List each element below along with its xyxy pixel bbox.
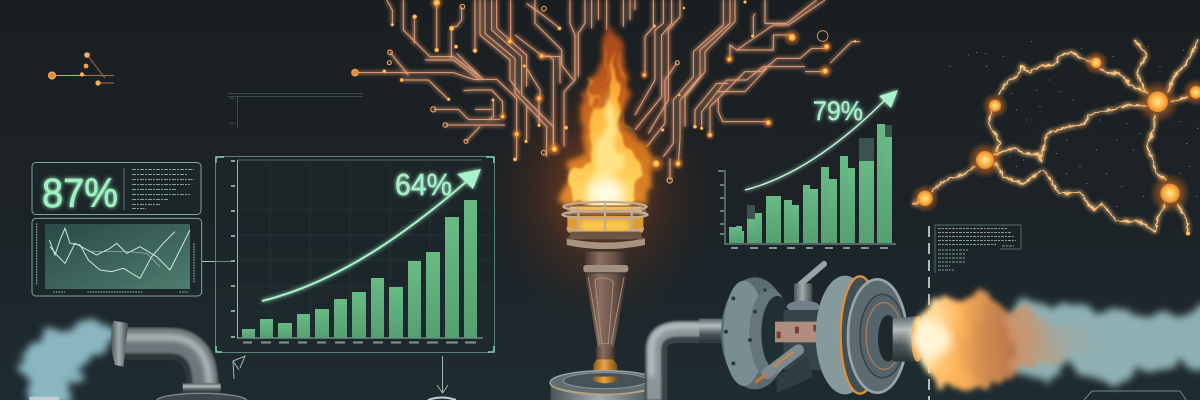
- y axis tick marks: [231, 161, 235, 337]
- line chart panel: [32, 218, 202, 296]
- first housing: [721, 277, 793, 389]
- axes: [238, 160, 483, 338]
- y ticks: [718, 171, 724, 234]
- bottom right panel fragment: [1084, 391, 1186, 400]
- dashed guide line: [928, 226, 930, 400]
- elbow pipe: [120, 337, 209, 385]
- fire glow behind torch: [480, 50, 720, 330]
- line series: [49, 228, 190, 278]
- stat value 87%: 87%: [42, 170, 118, 216]
- small arrow annotations: [233, 356, 448, 393]
- x ticks: [731, 247, 888, 249]
- bars: [729, 124, 892, 243]
- flame body: [917, 295, 1097, 386]
- centre band: [775, 322, 838, 342]
- smoke plume: [1003, 300, 1200, 382]
- shadow bars: [747, 125, 892, 219]
- second housing: [816, 276, 879, 394]
- stat panel: 87%: [32, 162, 201, 216]
- bar chart: 79%: [718, 90, 898, 248]
- left pipe and steam: [20, 318, 247, 400]
- turbine engine: [651, 264, 923, 400]
- feed pipe: [651, 319, 723, 400]
- chart frame: [216, 156, 494, 352]
- stars: [950, 42, 1198, 207]
- bottom centre fragment: [428, 398, 456, 400]
- junction nodes: [910, 50, 1200, 236]
- nozzle: [893, 316, 923, 362]
- circuit nodes: [352, 0, 856, 183]
- exhaust flame and smoke: [912, 295, 1200, 386]
- torch gold collar: [593, 347, 617, 384]
- bars: [242, 200, 477, 338]
- circuit traces rising from flame: [352, 0, 860, 183]
- central flame: [561, 23, 654, 207]
- burner base: [550, 371, 660, 400]
- steam cloud: [20, 318, 113, 400]
- small circuit fragment top left: [48, 48, 114, 94]
- trend arrow: [745, 90, 898, 190]
- torch neck and cone: [583, 252, 628, 347]
- valve and lever: [783, 264, 824, 370]
- text annotation box: [935, 225, 1021, 273]
- torch cup: [562, 202, 648, 249]
- pipe flange: [111, 321, 247, 400]
- bolts: [912, 40, 1198, 233]
- torch burner: [550, 202, 660, 400]
- stat value 64%: 64%: [395, 167, 452, 202]
- white fragment: [29, 397, 59, 400]
- lightning network with stars: [910, 40, 1200, 236]
- connector line: [202, 260, 231, 262]
- left traces: [355, 0, 635, 160]
- stat value 79%: 79%: [813, 96, 863, 126]
- faint upper chart frame: [228, 94, 363, 128]
- trend arrow: [262, 169, 481, 301]
- front disc: [848, 279, 907, 393]
- lower arm: [755, 350, 813, 393]
- x axis tick marks: [243, 342, 476, 344]
- axes: [725, 170, 896, 244]
- bar chart: 64%: [216, 156, 494, 352]
- right traces: [635, 0, 860, 180]
- panel description lines: [132, 170, 194, 208]
